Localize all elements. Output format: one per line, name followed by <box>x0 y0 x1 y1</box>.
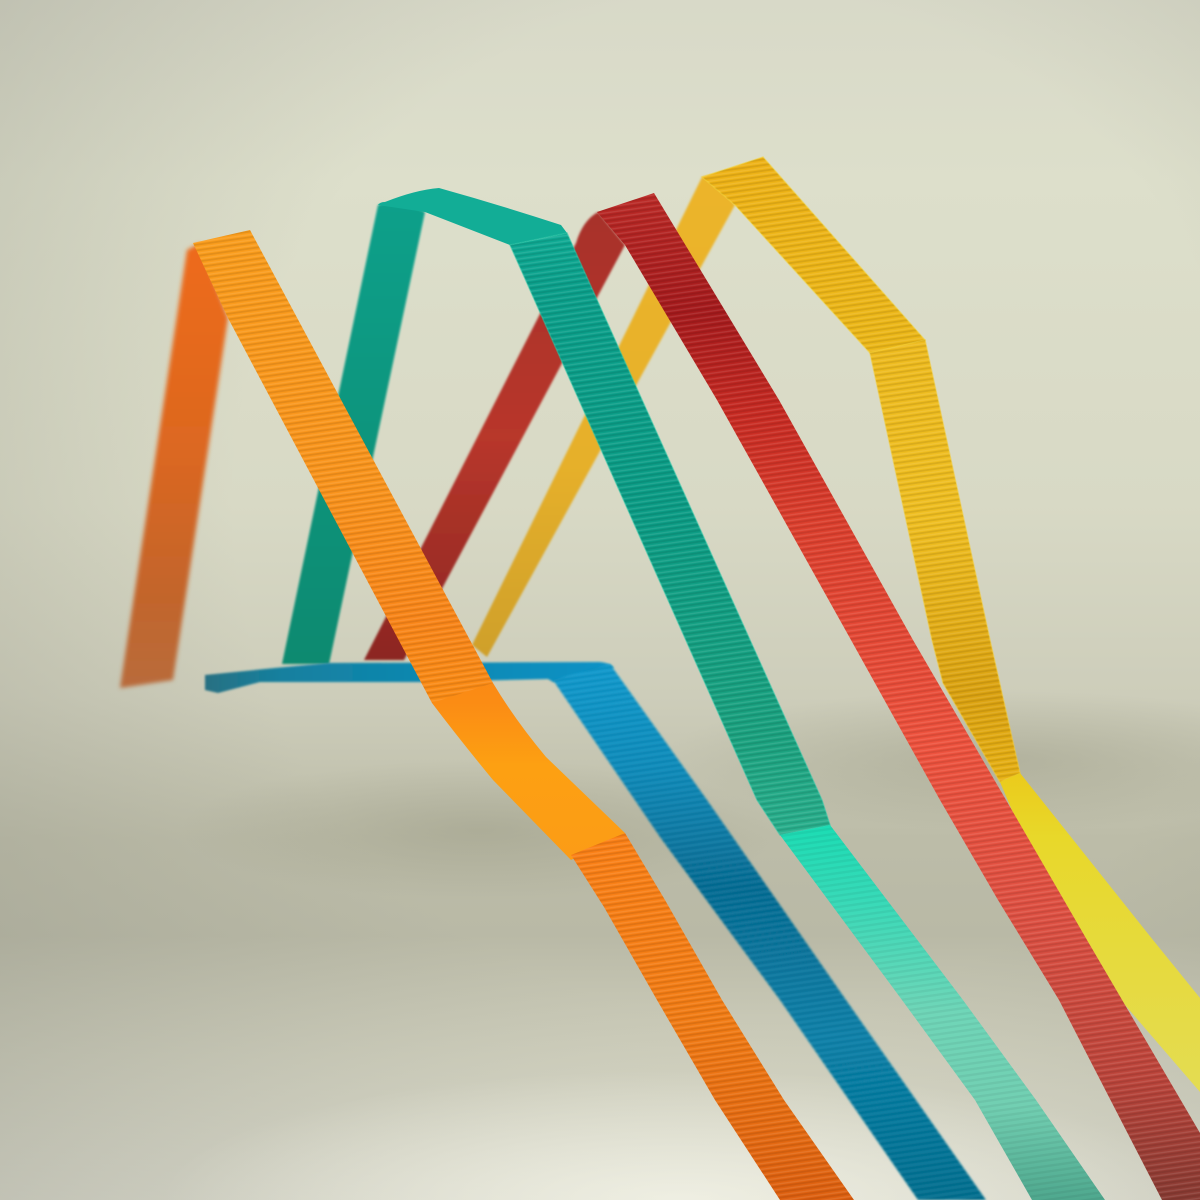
ribbon: blue ribbon <box>205 662 986 1200</box>
yellow bright tail <box>1000 773 1200 1092</box>
ribbon: red front strand <box>597 193 1200 1200</box>
ribbon: orange back strand <box>120 243 228 688</box>
ribbon: teal back strand <box>282 200 425 664</box>
ribbon: red back strand <box>364 212 625 660</box>
ribbon: orange front strand <box>193 230 854 1200</box>
teal middle band <box>510 233 830 835</box>
orange lower band <box>571 833 854 1200</box>
yellow top fold <box>702 157 925 353</box>
teal top fold <box>378 188 567 245</box>
ribbon: teal front strand <box>378 188 1105 1200</box>
yellow middle band <box>870 340 1020 782</box>
ribbon: yellow back strand <box>472 175 735 657</box>
orange upper band <box>193 230 625 860</box>
ribbon: yellow front strand <box>702 157 1200 1092</box>
teal light lower band <box>780 825 1105 1200</box>
blue front strand <box>553 664 986 1200</box>
blue thin horizontal strand <box>205 662 614 693</box>
